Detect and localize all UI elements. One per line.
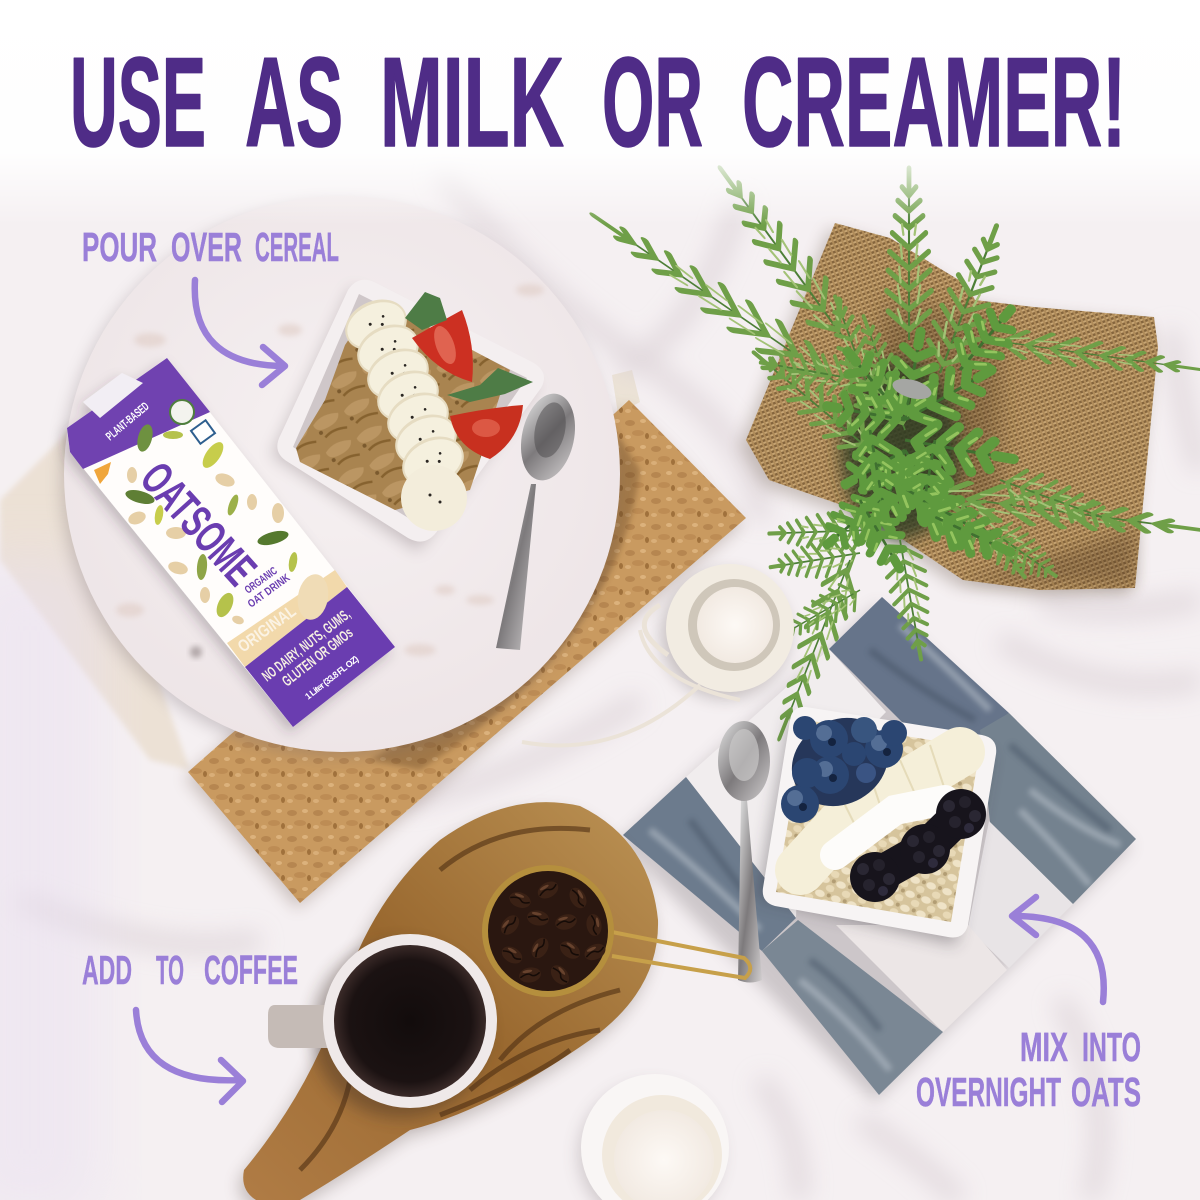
spoon on marble board (496, 389, 583, 650)
creamer jug (578, 1074, 729, 1200)
callout: mix into overnight oats: MIX (1020, 1024, 1068, 1070)
callout: mix into overnight oats (916, 897, 1141, 1115)
blueberries (776, 701, 904, 823)
banana band (800, 752, 960, 870)
oat drink carton: GLUTEN OR GMOs (279, 624, 356, 690)
wooden coffee board (239, 802, 658, 1200)
marble round board (61, 196, 620, 757)
title: MILK (380, 31, 564, 173)
title (70, 31, 1126, 173)
cereal bowl (272, 280, 544, 551)
milk bottle (522, 564, 794, 745)
coconut flakes (835, 800, 945, 855)
oat drink carton: 1 Liter (33.8 FL OZ) (303, 654, 360, 702)
text: CEREAL (255, 224, 339, 270)
callout: pour over cereal (82, 224, 339, 385)
oats and berries bowl (757, 701, 996, 945)
top white fade (0, 0, 1200, 225)
arrow: to oats bowl (1012, 897, 1104, 1002)
oat drink carton: ORIGINAL (234, 601, 300, 656)
cork trivet (185, 400, 746, 909)
burlap sack (740, 223, 1158, 596)
coffee cup (268, 934, 497, 1118)
callout: add to coffee: TO (156, 947, 184, 993)
banana slices (337, 290, 478, 542)
oat drink carton: OAT DRINK (246, 572, 292, 610)
slate and marble board (619, 597, 1136, 1102)
fern centre clump (814, 295, 1028, 579)
strawberries (405, 292, 533, 459)
spoon on slate board (718, 721, 770, 982)
carton badges (170, 400, 194, 424)
callout: mix into overnight oats: OVERNIGHT (916, 1069, 1061, 1115)
callout: pour over cereal: OVER (171, 224, 242, 270)
carton leaves and oats (124, 423, 299, 626)
callout: add to coffee: COFFEE (204, 947, 298, 993)
callout: pour over cereal: POUR (82, 224, 157, 270)
blackberries (850, 789, 986, 902)
carton purple top band (67, 358, 210, 469)
arrow: to coffee cup (136, 1010, 243, 1102)
title: AS (245, 31, 343, 173)
cereal flakes (296, 305, 510, 510)
measuring cup of coffee beans (482, 865, 750, 997)
callout: mix into overnight oats: INTO (1082, 1024, 1141, 1070)
carton cream band (227, 570, 347, 667)
slate stripes (829, 597, 1009, 770)
title: USE (70, 31, 206, 173)
carton text: PLANT-BASED (103, 399, 152, 443)
arrow: to cereal bowl (195, 280, 285, 385)
oat drink carton (67, 358, 395, 727)
oat drink carton: OATSOME (131, 452, 267, 595)
oat drink carton: ORGANIC (243, 565, 280, 596)
callout: mix into overnight oats: OATS (1071, 1069, 1141, 1115)
title: OR (602, 31, 703, 173)
oat drink carton: NO DAIRY, NUTS, GUMS, (259, 606, 354, 685)
fern plant (584, 156, 1200, 745)
callout: add to coffee (82, 947, 298, 1102)
callout: add to coffee: ADD (82, 947, 132, 993)
white marble stripes (686, 649, 886, 918)
carton purple base panel (245, 587, 395, 727)
